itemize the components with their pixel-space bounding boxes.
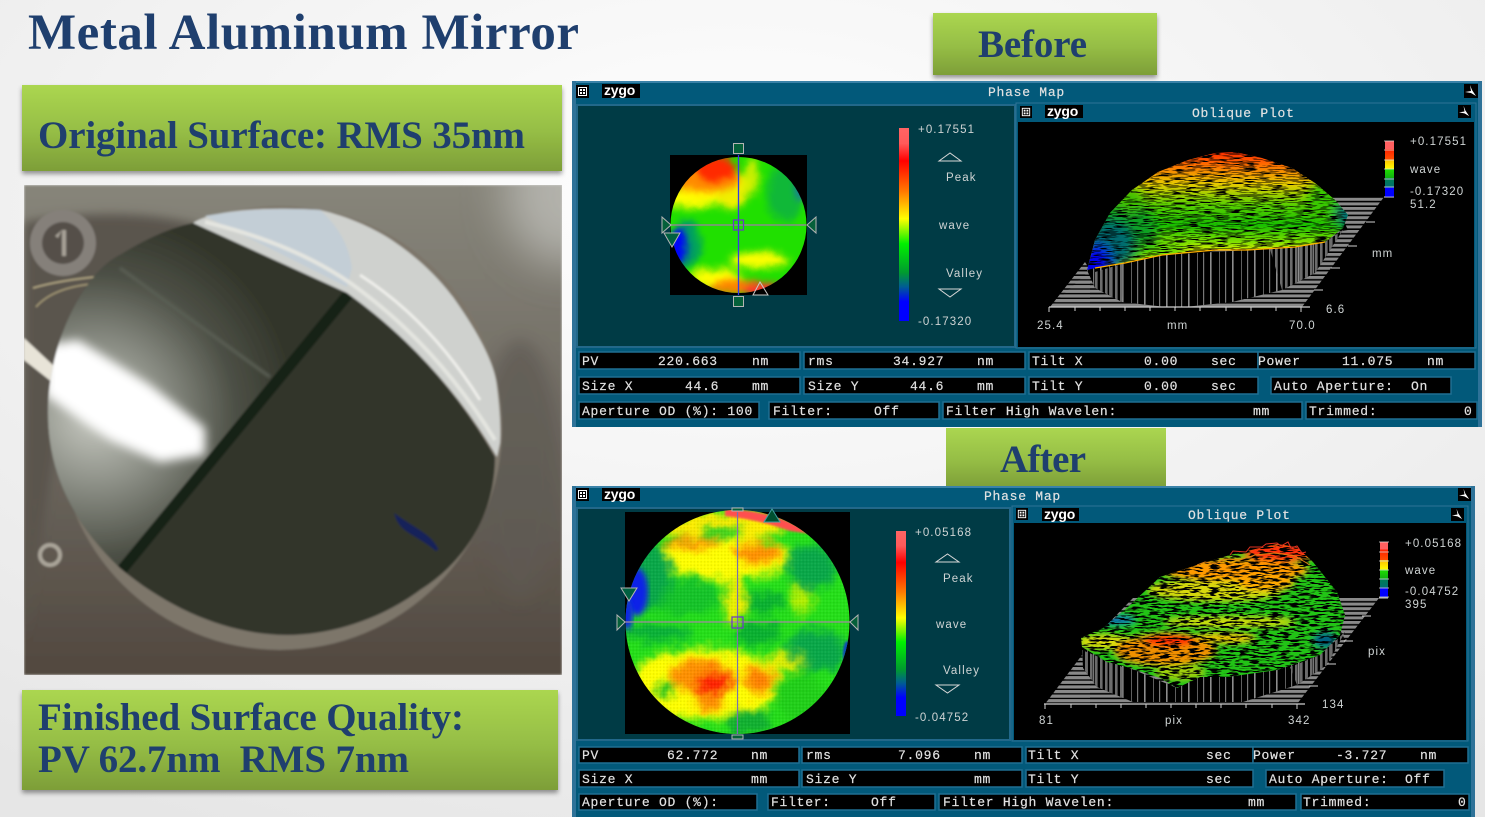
label: before: Before xyxy=(978,23,1087,66)
oblique plot window: zygo xyxy=(1047,103,1078,119)
oblique plot window xyxy=(1016,103,1476,348)
stats table after: Size Y xyxy=(806,772,857,787)
title bar: phase map xyxy=(576,486,1471,504)
crosshair and markers xyxy=(662,144,816,306)
stats table before: 0.00 xyxy=(1144,354,1178,369)
oblique plot window: Oblique Plot xyxy=(1188,508,1291,523)
stats table after: 62.772 xyxy=(667,748,718,763)
small color scale: 51.2 xyxy=(1410,199,1437,211)
phase map 2 xyxy=(626,510,850,734)
stats table after: sec xyxy=(1206,772,1232,787)
axis labels xyxy=(1037,248,1393,332)
phase map window xyxy=(577,495,1010,750)
stats table after: Auto Aperture: xyxy=(1269,772,1389,787)
stats table before: mm xyxy=(977,379,994,394)
small color scale: +0.05168 xyxy=(1405,538,1462,550)
stats table after: Aperture OD (%): xyxy=(582,795,719,810)
stats table before: 0.00 xyxy=(1144,379,1178,394)
axis labels: 81 xyxy=(1039,715,1054,727)
oblique plot window: zygo xyxy=(1044,506,1075,522)
color scale: +0.17551 xyxy=(918,124,975,136)
label: finished surface quality xyxy=(22,690,558,790)
stats table after: mm xyxy=(751,772,768,787)
stats table after: Off xyxy=(1405,772,1431,787)
stats table before: Size Y xyxy=(808,379,859,394)
stats table before: rms xyxy=(808,354,834,369)
label: finished surface quality: PV 62.7nm RMS 7nm xyxy=(38,738,409,781)
label: original surface: Original Surface: RMS 35nm xyxy=(38,114,525,157)
stats table before: mm xyxy=(1253,404,1270,419)
stats table before: Tilt X xyxy=(1032,354,1083,369)
stats table after: PV xyxy=(582,748,599,763)
color scale xyxy=(899,124,983,328)
label: original surface xyxy=(22,85,562,171)
stats table after: 0 xyxy=(1458,795,1467,810)
panel: after zygo interferometer xyxy=(572,486,1475,817)
stats table before: mm xyxy=(752,379,769,394)
photo: aluminum mirror xyxy=(24,185,562,675)
stats table after: Filter High Wavelen: xyxy=(943,795,1114,810)
small color scale: -0.04752 xyxy=(1405,586,1459,598)
title bar: phase map: Phase Map xyxy=(984,489,1061,504)
stats table after: mm xyxy=(974,772,991,787)
stats table before: sec xyxy=(1211,379,1237,394)
color scale: Peak xyxy=(943,573,974,585)
stats table after: Tilt X xyxy=(1028,748,1079,763)
stats table after: Power xyxy=(1253,748,1296,763)
color scale: Valley xyxy=(943,665,980,677)
axis labels: 6.6 xyxy=(1326,304,1345,316)
axis labels: 70.0 xyxy=(1289,320,1316,332)
stats table before: 11.075 xyxy=(1342,354,1393,369)
stats table before: Power xyxy=(1258,354,1301,369)
color scale xyxy=(896,527,980,724)
stats table after: Tilt Y xyxy=(1028,772,1079,787)
title bar: phase map: zygo xyxy=(604,486,635,502)
3d surface before xyxy=(1049,145,1394,312)
axis labels: 134 xyxy=(1322,699,1344,711)
stats table before: Size X xyxy=(582,379,633,394)
color scale: Peak xyxy=(946,172,977,184)
panel: before zygo interferometer xyxy=(572,81,1482,427)
stats table after: nm xyxy=(974,748,991,763)
stats table after: nm xyxy=(751,748,768,763)
stats table before: Tilt Y xyxy=(1032,379,1083,394)
small color scale xyxy=(1379,538,1462,611)
small color scale: +0.17551 xyxy=(1410,136,1467,148)
stats table before: Filter High Wavelen: xyxy=(946,404,1117,419)
stats table before: 220.663 xyxy=(658,354,718,369)
title bar: phase map: Phase Map xyxy=(988,85,1065,100)
stats table before: PV xyxy=(582,354,599,369)
axis labels: pix xyxy=(1368,646,1386,658)
label: before xyxy=(933,13,1157,75)
axis labels: mm xyxy=(1167,320,1188,332)
stats table before: Filter: xyxy=(773,404,833,419)
stats table before: nm xyxy=(1427,354,1444,369)
title bar: phase map: zygo xyxy=(604,82,635,98)
small color scale: wave xyxy=(1409,164,1441,176)
color scale: wave xyxy=(938,220,970,232)
phase map 1 xyxy=(670,157,806,293)
small color scale: wave xyxy=(1404,565,1436,577)
stats table before: sec xyxy=(1211,354,1237,369)
title bar: phase map xyxy=(576,82,1478,100)
axis labels xyxy=(1039,646,1386,727)
stats table before: nm xyxy=(977,354,994,369)
stats table after: mm xyxy=(1248,795,1265,810)
axis labels: 342 xyxy=(1288,715,1310,727)
stats table after: sec xyxy=(1206,748,1232,763)
label: after xyxy=(946,428,1166,488)
stats table before: Aperture OD (%): 100 xyxy=(582,404,753,419)
phase map window xyxy=(577,105,1015,347)
label: after: After xyxy=(1000,438,1086,481)
stats table after: Trimmed: xyxy=(1303,795,1371,810)
axis labels: mm xyxy=(1372,248,1393,260)
stats table after: Off xyxy=(871,795,897,810)
stats table before: nm xyxy=(752,354,769,369)
stats table before: Off xyxy=(874,404,900,419)
3d surface after xyxy=(1044,535,1388,709)
stats table before xyxy=(579,352,1477,419)
axis labels: pix xyxy=(1165,715,1183,727)
stats table before: 34.927 xyxy=(893,354,944,369)
stats table before: Trimmed: xyxy=(1309,404,1377,419)
label: finished surface quality: Finished Surface Quality: xyxy=(38,696,464,739)
title: Metal Aluminum Mirror xyxy=(28,5,579,61)
stats table after: rms xyxy=(806,748,832,763)
crosshair and markers xyxy=(617,508,858,739)
oblique plot window xyxy=(1012,506,1468,741)
color scale: Valley xyxy=(946,268,983,280)
stats table after: nm xyxy=(1420,748,1437,763)
stats table before: 44.6 xyxy=(685,379,719,394)
stats table after xyxy=(579,747,1469,810)
axis labels: 25.4 xyxy=(1037,320,1064,332)
stats table after: Size X xyxy=(582,772,633,787)
oblique plot window: Oblique Plot xyxy=(1192,106,1295,121)
color scale: wave xyxy=(935,619,967,631)
color scale: +0.05168 xyxy=(915,527,972,539)
stats table before: 44.6 xyxy=(910,379,944,394)
stats table before: On xyxy=(1411,379,1428,394)
small color scale: -0.17320 xyxy=(1410,186,1464,198)
small color scale xyxy=(1384,136,1467,211)
stats table after: Filter: xyxy=(771,795,831,810)
stats table before: Auto Aperture: xyxy=(1274,379,1394,394)
stats table before: 0 xyxy=(1464,404,1473,419)
small color scale: 395 xyxy=(1405,599,1428,611)
stats table after: 7.096 xyxy=(898,748,941,763)
color scale: -0.17320 xyxy=(918,316,972,328)
stats table after: -3.727 xyxy=(1336,748,1387,763)
color scale: -0.04752 xyxy=(915,712,969,724)
